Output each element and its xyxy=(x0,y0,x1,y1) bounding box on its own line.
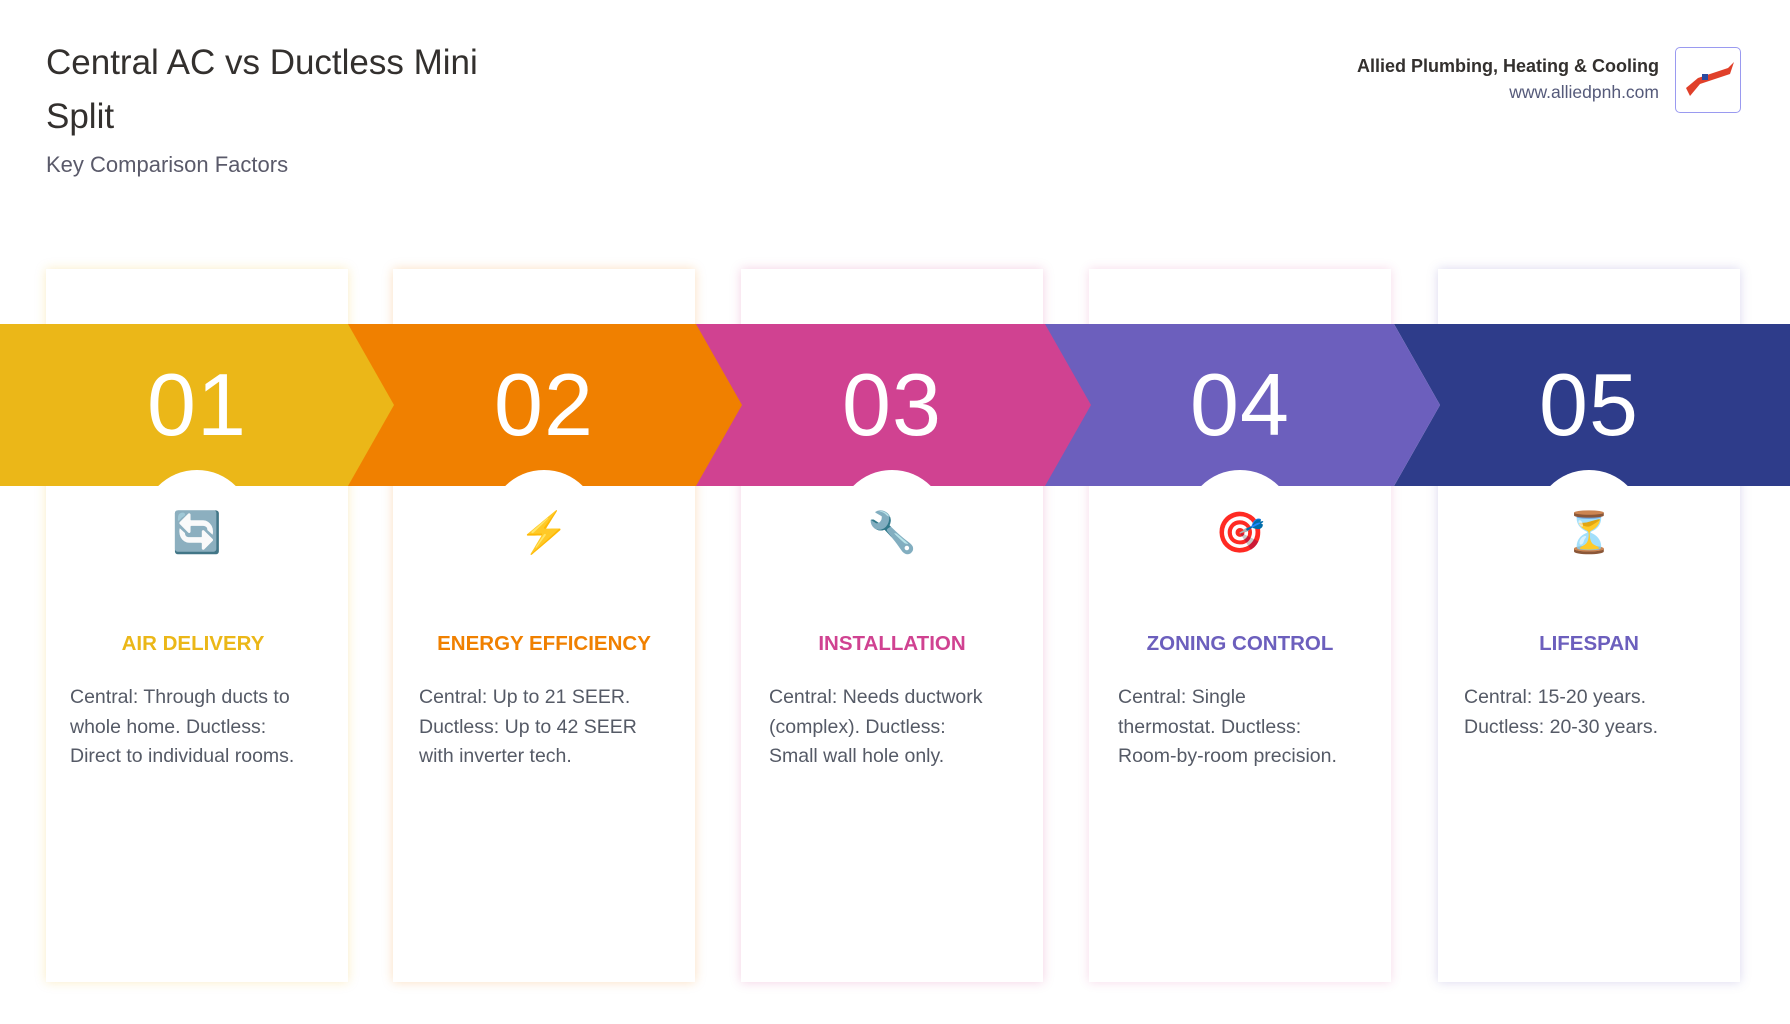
step 3: Small wall hole only. xyxy=(769,745,944,767)
company info: www.alliedpnh.com xyxy=(1509,82,1659,102)
step 3 xyxy=(769,510,983,767)
step 1: whole home. Ductless: xyxy=(70,716,266,738)
step 4 xyxy=(1118,511,1337,767)
text: 05 xyxy=(1539,355,1639,454)
step 5: ⏳ xyxy=(1564,511,1614,555)
circles xyxy=(142,470,252,580)
step 1: Central: Through ducts to xyxy=(70,686,290,708)
step 5 xyxy=(1464,510,1658,738)
cards xyxy=(46,269,348,982)
step 4: Room-by-room precision. xyxy=(1118,745,1337,767)
logo xyxy=(1675,47,1741,113)
company info xyxy=(1357,56,1659,102)
text: 03 xyxy=(842,355,942,454)
step 2 xyxy=(419,510,651,767)
step 5: LIFESPAN xyxy=(1539,632,1639,655)
step 2: with inverter tech. xyxy=(419,745,572,767)
step 4: ZONING CONTROL xyxy=(1147,632,1333,655)
step 1 xyxy=(70,510,294,767)
company info: Allied Plumbing, Heating & Cooling xyxy=(1357,56,1659,76)
step 4: Central: Single xyxy=(1118,686,1246,708)
step 3: Central: Needs ductwork xyxy=(769,686,983,708)
step 4: thermostat. Ductless: xyxy=(1118,716,1301,738)
step 3: (complex). Ductless: xyxy=(769,716,946,738)
numbers: 01 xyxy=(147,355,247,454)
step 2: Central: Up to 21 SEER. xyxy=(419,686,630,708)
title: Central AC vs Ductless Mini Split xyxy=(46,43,478,136)
step 2: ⚡ xyxy=(519,511,569,555)
step 2: ENERGY EFFICIENCY xyxy=(437,632,651,655)
step 2: Ductless: Up to 42 SEER xyxy=(419,716,637,738)
step 5: Central: 15-20 years. xyxy=(1464,686,1646,708)
chevron band xyxy=(0,324,1790,486)
step 3: 🔧 xyxy=(867,511,917,555)
step 1: AIR DELIVERY xyxy=(122,632,264,655)
step 4: 🎯 xyxy=(1215,511,1265,555)
subtitle: Key Comparison Factors xyxy=(46,152,288,177)
step 3: INSTALLATION xyxy=(818,632,966,655)
step 5: Ductless: 20-30 years. xyxy=(1464,716,1658,738)
step 1: 🔄 xyxy=(172,511,222,555)
step 1: Direct to individual rooms. xyxy=(70,745,294,767)
text: 04 xyxy=(1190,355,1290,454)
text: 02 xyxy=(494,355,594,454)
